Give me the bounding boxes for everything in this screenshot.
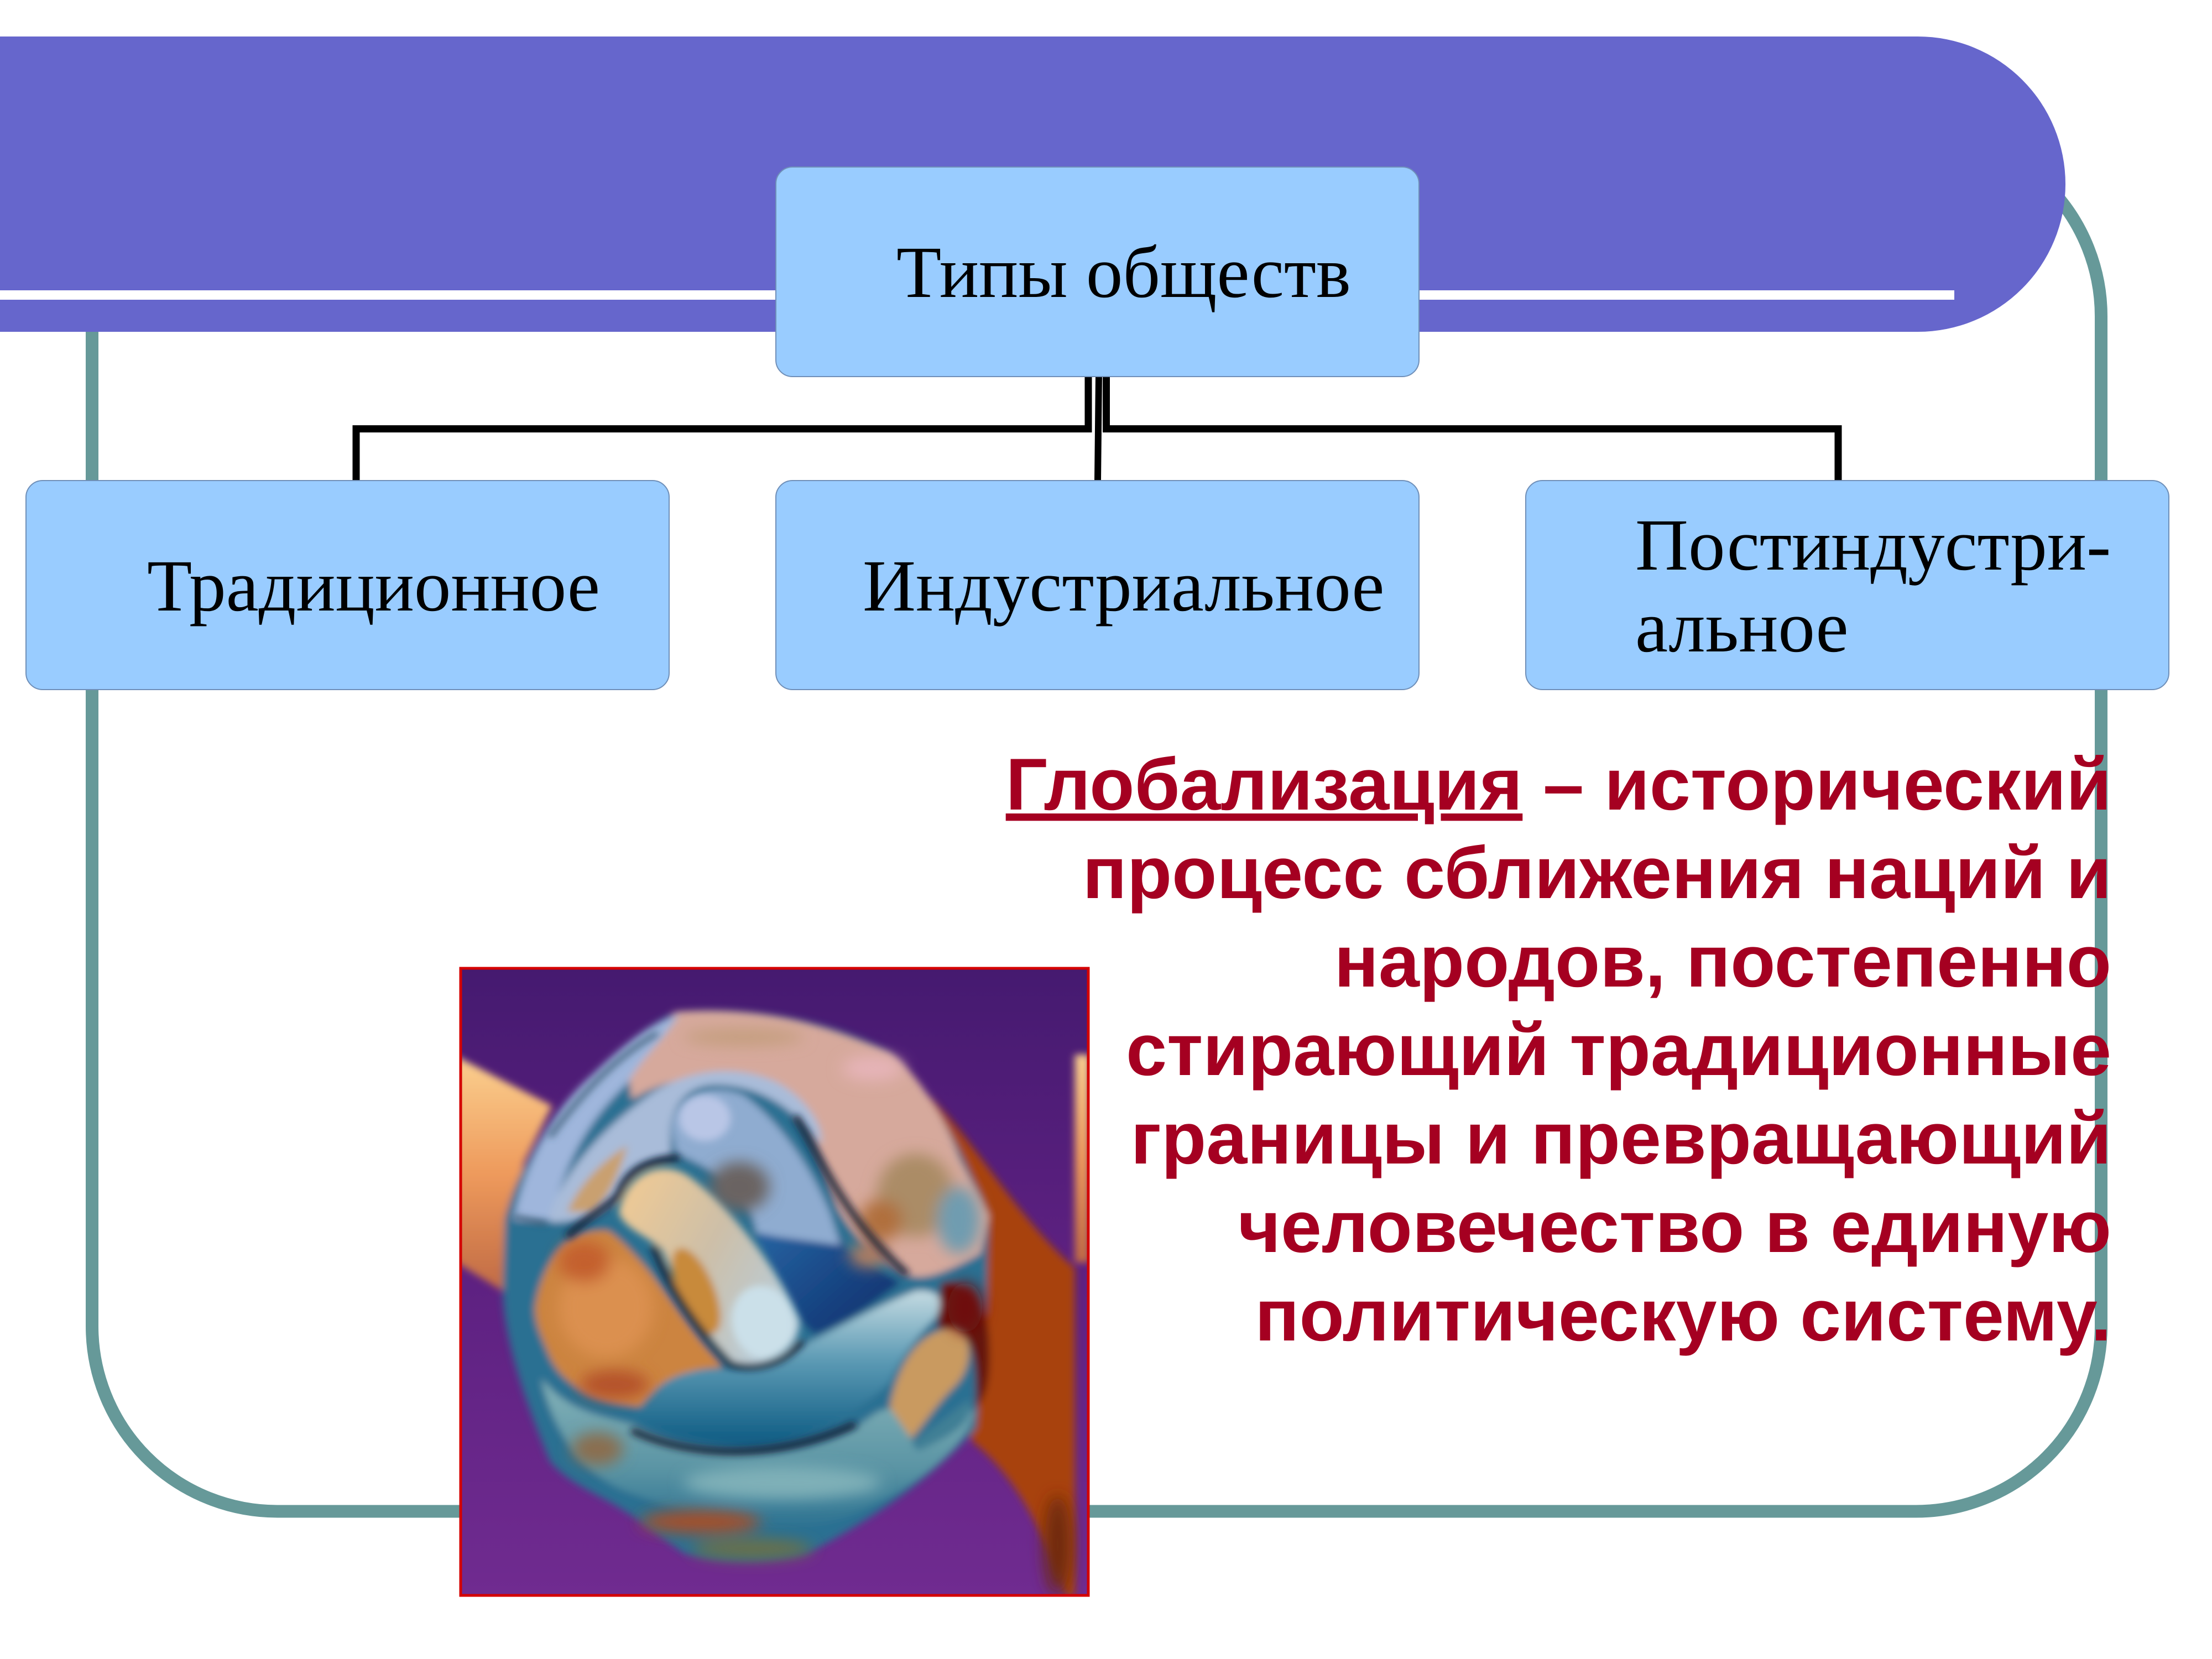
definition of globalization: народов, постепенно <box>1334 921 2111 1003</box>
highlights <box>679 1095 731 1141</box>
connectors between boxes <box>356 377 1838 481</box>
fingertips <box>890 1328 969 1438</box>
box: types of societies <box>776 167 1419 377</box>
box: post-industrial <box>1526 481 2169 690</box>
tan on upper fingers <box>567 1145 628 1212</box>
upper finger <box>672 1091 841 1245</box>
definition of globalization: границы и превращающий <box>1131 1098 2111 1180</box>
texture patches <box>559 1029 1071 1595</box>
creases <box>567 1116 907 1452</box>
back of hand, pink land <box>628 1011 989 1277</box>
box: post-industrial: Постиндустри- <box>1635 504 2111 586</box>
finger streaks <box>513 1033 658 1224</box>
box: industrial: Индустриальное <box>863 545 1384 627</box>
box: traditional <box>26 481 669 690</box>
tan finger shadow <box>662 1242 731 1340</box>
definition of globalization: стирающий традиционные <box>1126 1009 2111 1091</box>
box: traditional: Традиционное <box>147 545 600 627</box>
definition of globalization <box>1006 744 2111 1357</box>
lilac outer finger band <box>513 1014 679 1220</box>
ocean <box>757 1208 901 1334</box>
box: types of societies: Типы обществ <box>896 231 1351 313</box>
lower hand <box>541 1378 974 1530</box>
pale blue finger band <box>550 1071 822 1222</box>
right sliver of second arm <box>1075 1055 1089 1262</box>
inner finger <box>619 1168 800 1364</box>
globe base <box>503 1010 988 1561</box>
right arm <box>928 1095 1075 1597</box>
lower thumb <box>634 1291 941 1446</box>
teal rounded frame <box>92 131 2101 1511</box>
dark maroon shadow between fingers <box>937 1282 989 1407</box>
fingernail <box>725 1280 801 1364</box>
palm, orange land <box>535 1230 721 1407</box>
definition of globalization: политическую систему. <box>1255 1275 2111 1357</box>
lowest finger <box>916 1399 971 1451</box>
left arm <box>455 1056 552 1291</box>
red image border <box>461 968 1088 1595</box>
definition of globalization: Глобализация – исторический <box>1006 744 2111 826</box>
box: post-industrial: альное <box>1635 586 1849 667</box>
definition of globalization: человечество в единую <box>1238 1186 2111 1268</box>
definition of globalization: процесс сближения наций и <box>1083 832 2111 914</box>
box: industrial <box>776 481 1419 690</box>
photo: hands forming a painted globe <box>455 967 1089 1597</box>
title banner <box>0 36 2065 332</box>
